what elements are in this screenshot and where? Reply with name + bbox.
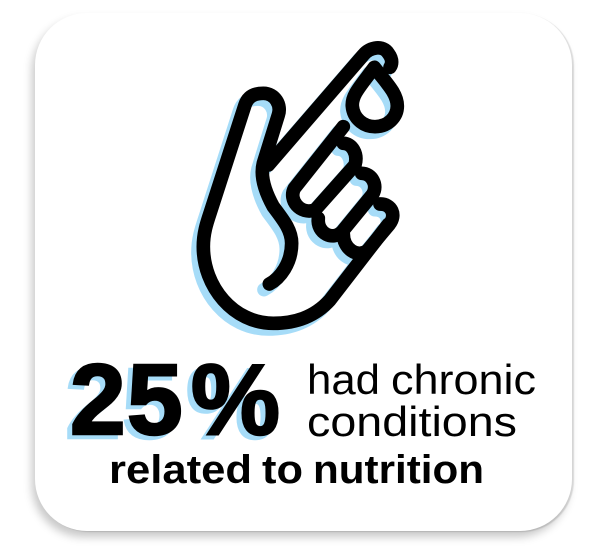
- text: related to nutrition: related: [109, 448, 252, 492]
- text: had chronic conditions: chronic: [391, 356, 536, 403]
- text: had chronic conditions: had: [307, 356, 380, 403]
- statistic: 25%: 2: [70, 344, 126, 456]
- statistic: 25%: [65, 344, 280, 460]
- text: had chronic conditions: conditions: [307, 398, 517, 445]
- statistic: 25%: 2: [65, 348, 121, 460]
- statistic: 25%: %: [191, 344, 280, 456]
- statistic: 25%: %: [186, 348, 275, 460]
- statistic: 25%: 5: [127, 344, 183, 456]
- text: related to nutrition: [109, 448, 484, 492]
- icon: hand with water drop: [198, 48, 397, 329]
- text: had chronic conditions: [307, 356, 536, 445]
- text: related to nutrition: to: [262, 448, 303, 492]
- text: related to nutrition: nutrition: [313, 448, 484, 492]
- statistic: 25%: 5: [122, 348, 178, 460]
